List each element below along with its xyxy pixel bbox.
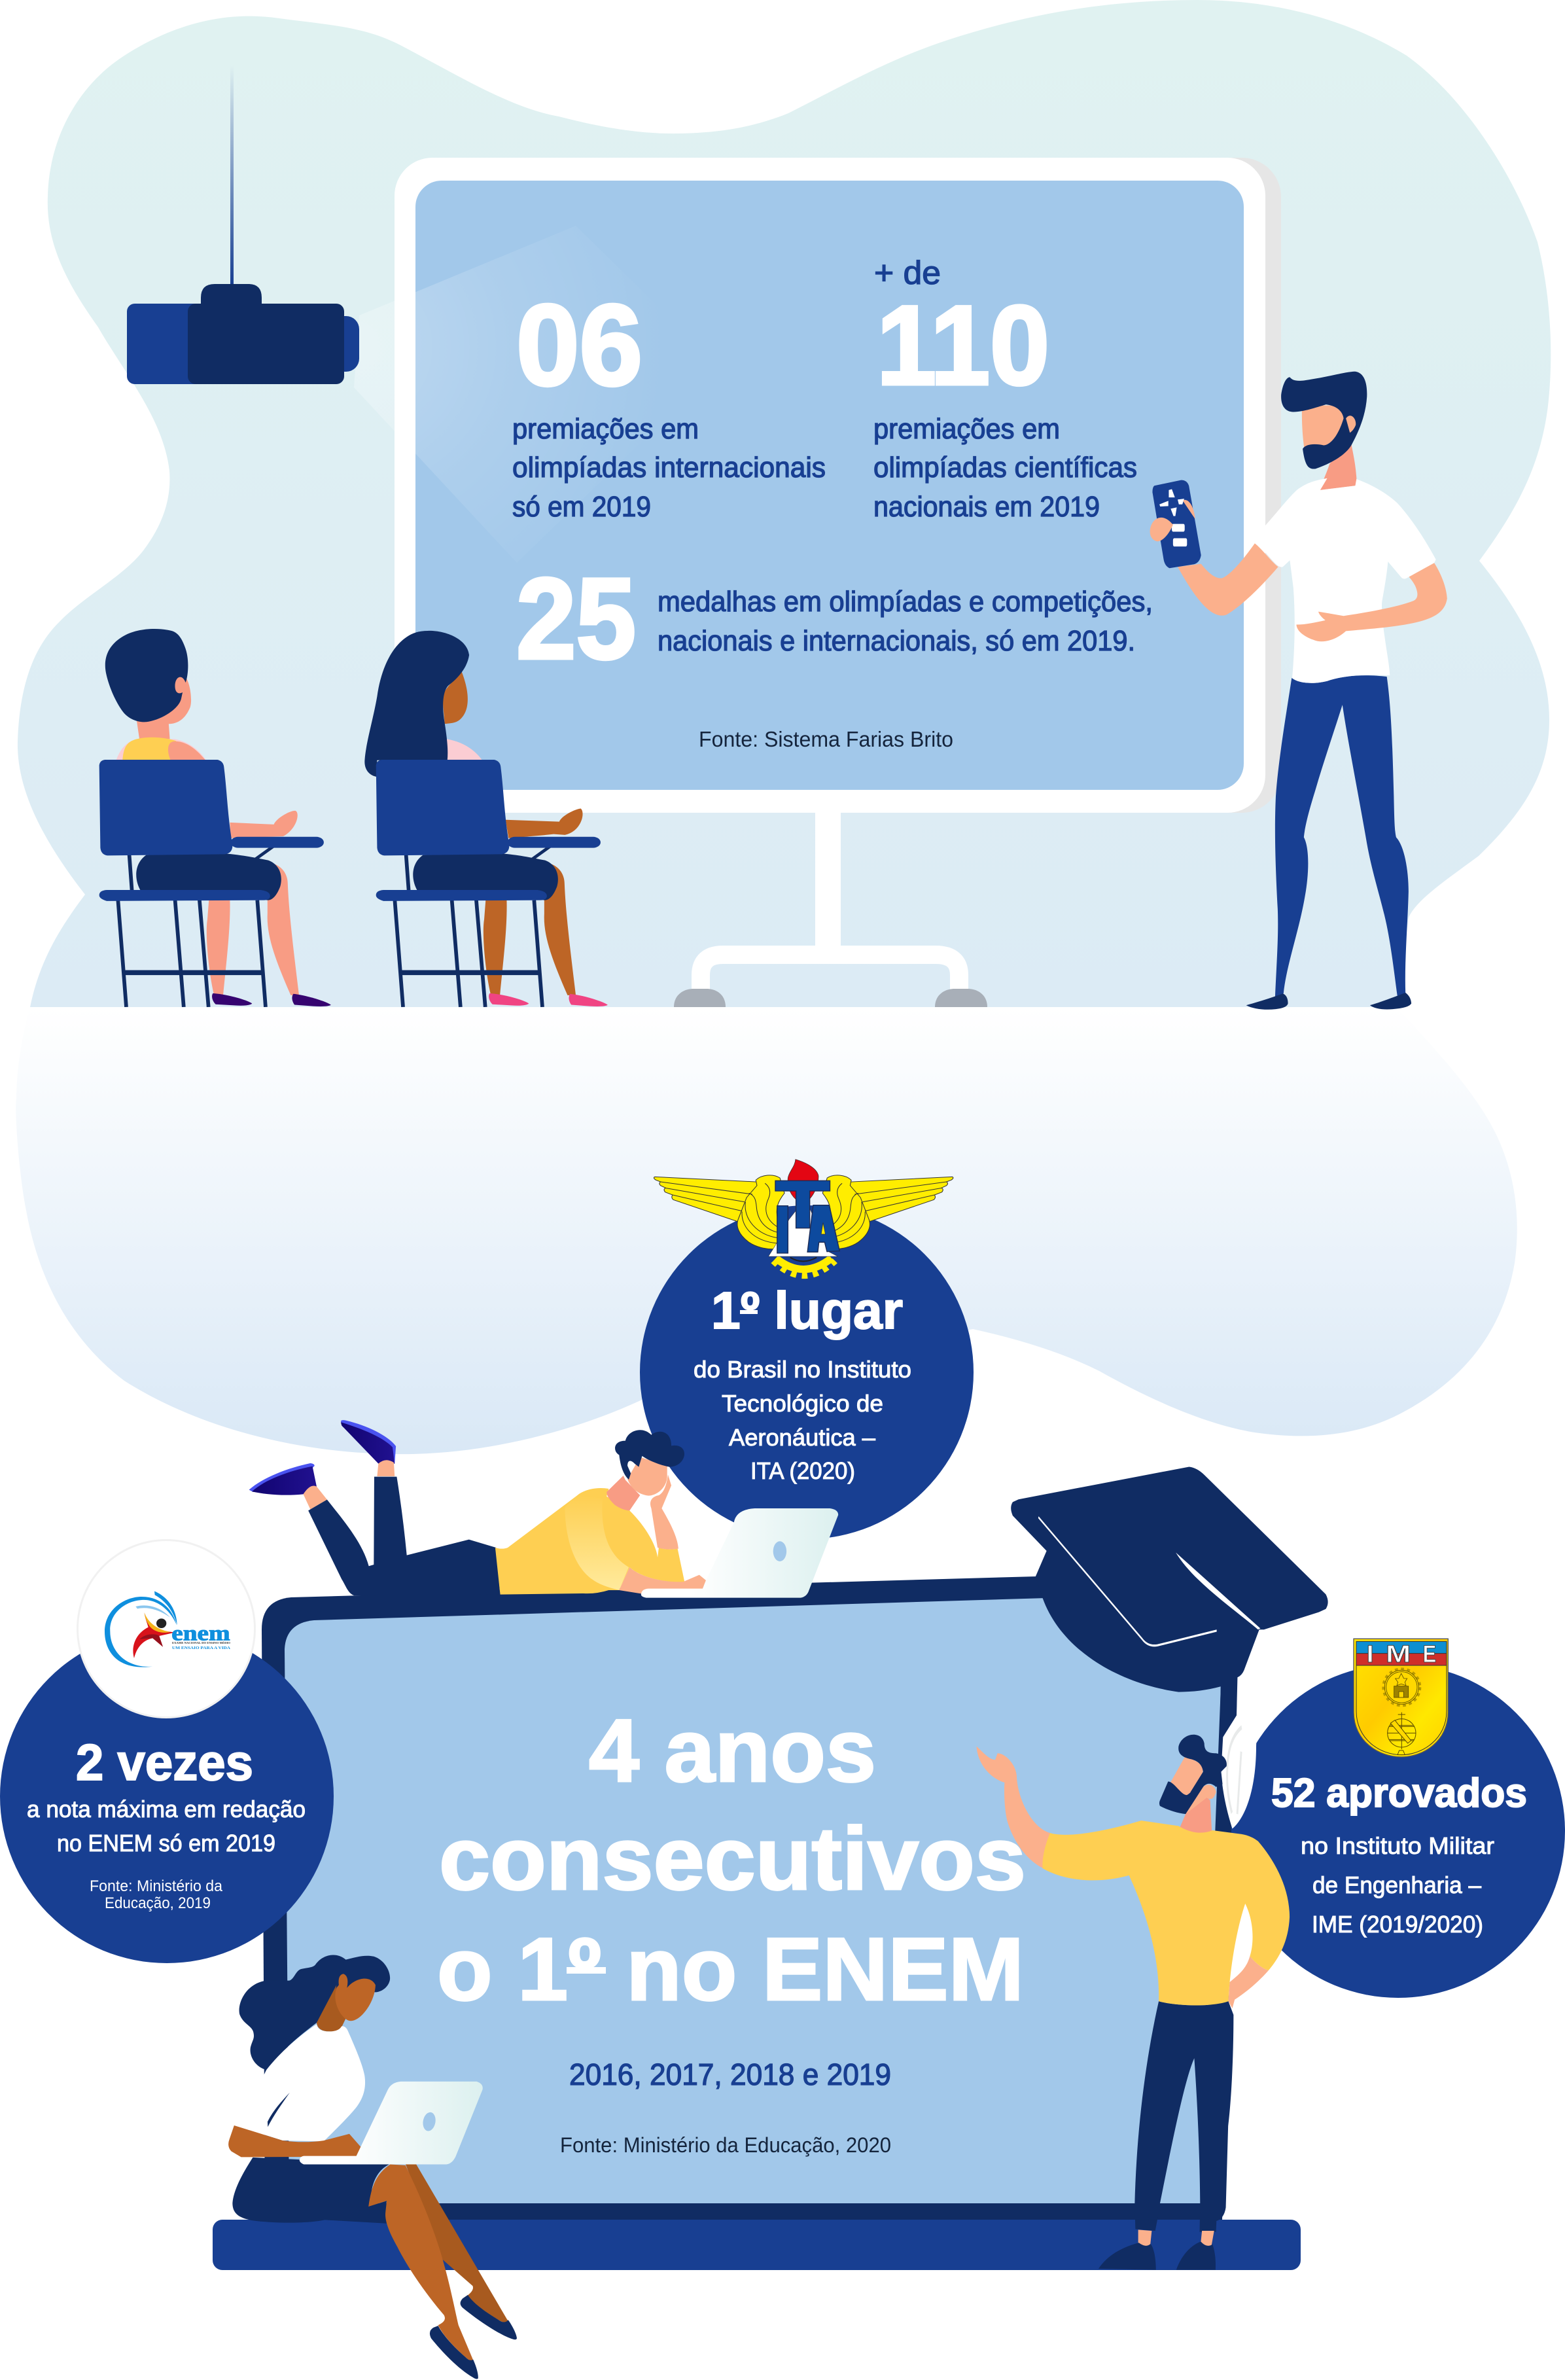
icon: ENEM logo badge: UM ENSAIO PARA A VIDA — [172, 1646, 230, 1650]
armillary sphere — [1388, 1713, 1416, 1755]
icon: graduation cap — [1011, 1466, 1328, 1830]
background blob: classroom — [18, 0, 1551, 1007]
panel: IME circle — [1231, 1664, 1565, 1998]
stat 110: 110 — [877, 283, 1049, 408]
text block: screen statistics — [512, 255, 1153, 751]
IME letters: E — [1423, 1640, 1436, 1667]
woman sitting with laptop — [228, 1955, 517, 2379]
text: ITA circle: 1º lugar — [711, 1281, 903, 1340]
wing right — [822, 1175, 953, 1249]
wing left — [654, 1175, 784, 1249]
IME letters — [1367, 1640, 1436, 1667]
stat 06 label: premiações em — [512, 413, 699, 445]
text: IME circle — [1271, 1771, 1527, 1938]
text: ITA circle: Tecnológico de — [722, 1390, 883, 1417]
panel: big board frame — [262, 1576, 1237, 2220]
text: IME circle: IME (2019/2020) — [1312, 1911, 1483, 1938]
stat 110 label: olimpíadas científicas — [873, 452, 1137, 484]
stat 25: 25 — [516, 555, 636, 683]
IME letters: M — [1386, 1640, 1411, 1667]
text: years: 2016, 2017, 2018 e 2019 — [569, 2057, 891, 2091]
gear and building — [1383, 1669, 1420, 1705]
stat 110 label: nacionais em 2019 — [873, 491, 1100, 523]
projector light beam — [354, 226, 720, 563]
student 1 — [99, 629, 331, 1007]
text: IME circle: de Engenharia – — [1312, 1872, 1481, 1898]
stat 06 label: só em 2019 — [512, 491, 651, 523]
stat 06 label: olimpíadas internacionais — [512, 452, 826, 484]
whiteboard screen — [395, 158, 1281, 813]
ITA letters — [775, 1181, 839, 1253]
student 2 — [364, 631, 608, 1007]
icon: ENEM logo badge: EXAME NACIONAL DO ENSINO MÉDIO — [172, 1641, 231, 1644]
text: ITA circle — [694, 1281, 911, 1484]
stat + de: + de — [874, 255, 941, 291]
icon: ENEM logo badge — [77, 1539, 256, 1718]
source note: Fonte: Sistema Farias Brito — [699, 727, 953, 751]
text: ENEM circle: a nota máxima em redação — [27, 1796, 306, 1822]
stat 25 label — [658, 586, 1153, 657]
heading: 4 anos consecutivos o 1º no ENEM: consecutivos — [439, 1809, 1026, 1908]
panel: ITA circle — [640, 1205, 974, 1539]
stat 25 label: medalhas em olimpíadas e competições, — [658, 586, 1153, 618]
heading: 4 anos consecutivos o 1º no ENEM: 4 anos — [589, 1701, 876, 1800]
text: ITA circle: ITA (2020) — [750, 1457, 855, 1484]
text: source note: Fonte: Ministério da Educação, 2020 — [560, 2133, 891, 2157]
text: ENEM circle: 2 vezes — [76, 1733, 253, 1791]
icon: white tassel — [1220, 1670, 1259, 1829]
panel: ENEM circle — [0, 1629, 334, 1963]
heading: 4 anos consecutivos o 1º no ENEM — [437, 1701, 1026, 2019]
man lying on the board with laptop — [249, 1420, 838, 1598]
presenter with remote — [1150, 372, 1447, 1010]
icon: ENEM logo badge: enem — [171, 1622, 230, 1646]
text: IME circle: 52 aprovados — [1271, 1771, 1527, 1816]
stat 25 label: nacionais e internacionais, só em 2019. — [658, 625, 1135, 657]
background blob: lower section — [16, 1008, 1517, 1454]
stat 110 label — [873, 413, 1137, 523]
text: ITA circle: Aeronáutica – — [729, 1424, 875, 1451]
icon: ITA logo — [654, 1160, 953, 1275]
text: ENEM circle — [27, 1733, 306, 1912]
icon: projector — [127, 284, 359, 384]
IME letters: I — [1367, 1640, 1374, 1667]
text: IME circle: no Instituto Militar — [1301, 1832, 1494, 1859]
stat 06 label — [512, 413, 826, 523]
man in yellow pointing — [976, 1735, 1290, 2270]
ceiling cable — [230, 65, 234, 285]
heading: 4 anos consecutivos o 1º no ENEM: o 1º no ENEM — [437, 1919, 1024, 2019]
text: ENEM circle: Educação, 2019 — [105, 1894, 211, 1912]
icon: IME shield — [1354, 1639, 1448, 1757]
students at desks — [99, 629, 608, 1007]
whiteboard stand — [674, 811, 987, 1007]
text: ENEM circle: no ENEM só em 2019 — [57, 1830, 275, 1856]
board base — [213, 2220, 1301, 2270]
stat 110 label: premiações em — [873, 413, 1060, 445]
text: ITA circle: do Brasil no Instituto — [694, 1356, 911, 1383]
stat 06: 06 — [516, 281, 642, 410]
gear — [773, 1258, 835, 1275]
text: ENEM circle: Fonte: Ministério da — [90, 1877, 223, 1895]
